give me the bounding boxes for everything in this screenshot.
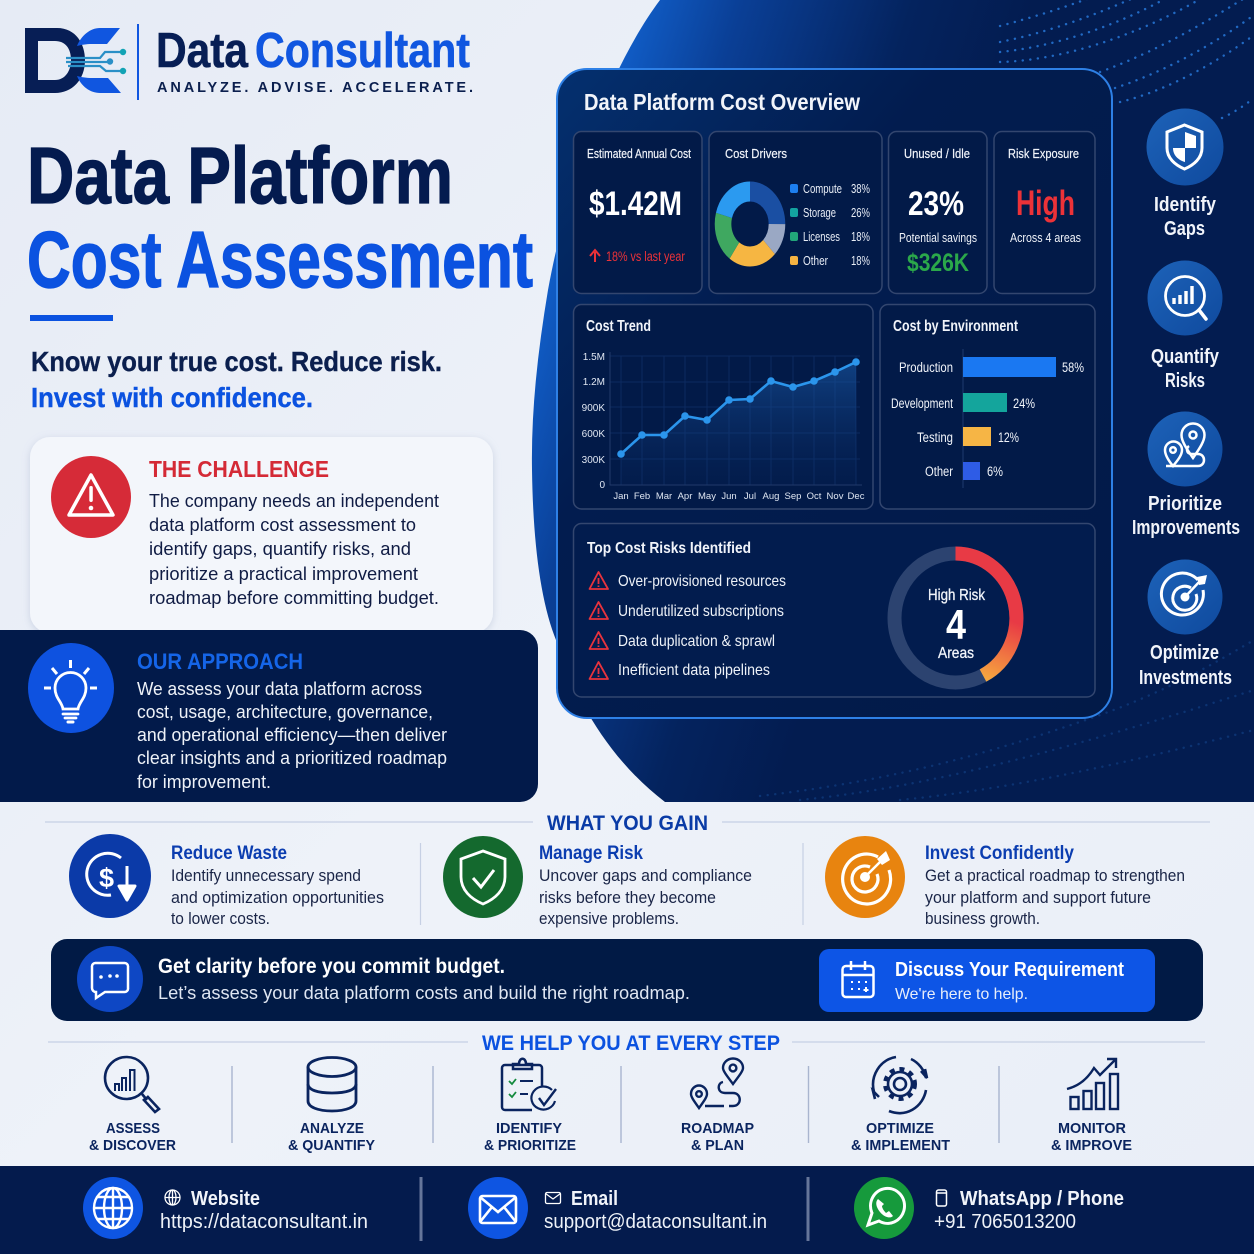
card: estimated annual cost: 18% vs last year (606, 249, 685, 264)
line chart: Jun (721, 491, 737, 502)
card: cost by environment: Cost by Environment (893, 318, 1019, 335)
legend: 26% (851, 206, 870, 220)
icon: optimize investments (1139, 560, 1232, 689)
line chart: Aug (763, 491, 779, 502)
step: analyze and quantify: ANALYZE (300, 1120, 364, 1137)
card: unused idle: 23% (908, 185, 964, 223)
card: risk exposure: High (1016, 184, 1075, 223)
line chart: Nov (827, 491, 844, 502)
panel: data platform cost overview (557, 69, 1112, 718)
title: Cost Assessment (27, 215, 533, 304)
icon: optimize investments: Investments (1139, 667, 1232, 689)
line chart (582, 352, 865, 502)
card: cost drivers: Cost Drivers (725, 146, 787, 161)
icon: identify gaps (1146, 108, 1224, 240)
card: unused idle: $326K (907, 249, 969, 277)
contact: email: Email (571, 1188, 618, 1210)
contact: website: Website (191, 1188, 260, 1210)
subtitle: Invest with confidence. (31, 382, 313, 413)
legend: Compute (803, 182, 842, 196)
benefit: manage risk: Uncover gaps and compliance (539, 867, 752, 885)
line chart: Sep (785, 491, 801, 502)
card: unused idle: Potential savings (899, 230, 977, 245)
step: optimize and implement (851, 1057, 950, 1154)
benefit: reduce waste: Identify unnecessary spend (171, 867, 361, 885)
step: roadmap and plan: & PLAN (691, 1137, 744, 1154)
approach text (137, 679, 447, 792)
bar chart (891, 349, 1084, 488)
logo mark: DC circuit (25, 28, 126, 93)
line chart: Jan (613, 491, 629, 502)
heading: we help you: WE HELP YOU AT EVERY STEP (482, 1032, 780, 1055)
risk list (590, 572, 786, 679)
section: we help you at every step (48, 1032, 1205, 1154)
card: cost trend (574, 304, 873, 509)
line chart: Jul (744, 491, 756, 502)
step: optimize and implement: OPTIMIZE (866, 1120, 934, 1137)
bar chart: Testing (917, 430, 953, 445)
line chart: Oct (807, 491, 822, 502)
contact: website: https://dataconsultant.in (160, 1211, 368, 1233)
contact: whatsapp: WhatsApp / Phone (960, 1188, 1124, 1210)
risk ring gauge: High Risk (928, 587, 986, 604)
line chart: 900K (582, 403, 605, 414)
risk ring gauge: Areas (938, 645, 974, 662)
step: monitor and improve: & IMPROVE (1051, 1137, 1132, 1154)
challenge text: The company needs an independent (149, 490, 439, 511)
logo: Consultant (255, 24, 470, 78)
benefit: invest confidently (825, 836, 1185, 928)
approach text: for improvement. (137, 772, 271, 792)
line chart: Dec (848, 491, 865, 502)
step: monitor and improve: MONITOR (1058, 1120, 1126, 1137)
bar chart: Development (891, 396, 953, 411)
footer (0, 1166, 1254, 1254)
title (27, 131, 533, 304)
card: estimated annual cost (574, 132, 702, 294)
section: what you gain (45, 812, 1210, 928)
challenge text: data platform cost assessment to (149, 514, 416, 535)
card: top cost risks (574, 524, 1095, 697)
icon: quantify risks: Quantify (1151, 346, 1220, 368)
challenge text: prioritize a practical improvement (149, 563, 418, 584)
challenge text: identify gaps, quantify risks, and (149, 538, 411, 559)
bar chart: Production (899, 360, 953, 375)
icon: quantify risks (1148, 260, 1222, 392)
icon: warning (51, 456, 131, 538)
bar chart: 12% (998, 430, 1019, 445)
benefit: reduce waste: $ (99, 863, 114, 893)
step: identify and prioritize: & PRIORITIZE (484, 1137, 576, 1154)
benefit: reduce waste (69, 834, 384, 928)
step: assess and discover (89, 1057, 176, 1154)
card: cost trend: Cost Trend (586, 318, 651, 335)
legend (790, 182, 870, 268)
bar chart: Other (925, 464, 953, 479)
logo (25, 24, 473, 100)
cta text (158, 955, 690, 1003)
legend: 18% (851, 254, 870, 268)
step: monitor and improve (1051, 1059, 1132, 1154)
heading: what you gain: WHAT YOU GAIN (547, 812, 708, 835)
benefit: invest confidently: Get a practical roadmap to strengthen (925, 867, 1185, 885)
panel: the challenge (30, 437, 493, 633)
card: unused idle (888, 132, 987, 294)
icon: optimize investments: Optimize (1150, 642, 1219, 664)
card: unused idle: Unused / Idle (904, 146, 970, 161)
icon: identify gaps: Identify (1154, 194, 1217, 216)
approach text: clear insights and a prioritized roadmap (137, 748, 447, 768)
step: roadmap and plan: ROADMAP (681, 1120, 754, 1137)
step: identify and prioritize: IDENTIFY (496, 1120, 562, 1137)
legend: Other (803, 254, 828, 268)
step: optimize and implement: & IMPLEMENT (851, 1137, 950, 1154)
benefit: reduce waste: to lower costs. (171, 910, 270, 928)
line chart: Apr (678, 491, 692, 502)
card: top cost risks: Top Cost Risks Identified (587, 540, 751, 557)
cta text: Get clarity before you commit budget. (158, 955, 505, 978)
button: discuss your requirement: Discuss Your Requirement (895, 959, 1124, 981)
button: discuss your requirement (819, 949, 1155, 1012)
icon: chat bubble (77, 946, 143, 1012)
step: analyze and quantify: & QUANTIFY (288, 1137, 375, 1154)
benefit: invest confidently: Invest Confidently (925, 843, 1074, 864)
column: value icons (1132, 108, 1240, 689)
call to action banner (51, 939, 1203, 1021)
dashboard heading: Data Platform Cost Overview (584, 89, 860, 115)
line chart: May (698, 491, 716, 502)
benefit: invest confidently: your platform and support future (925, 889, 1151, 907)
contact: website (83, 1177, 368, 1239)
logo wordmark: Data (156, 24, 249, 78)
line chart: 0 (599, 480, 605, 491)
risk ring gauge (894, 554, 1016, 682)
risk ring gauge: 4 (946, 601, 967, 648)
icon: quantify risks: Risks (1165, 370, 1205, 392)
risk list: Data duplication & sprawl (618, 633, 775, 650)
bar chart: 24% (1013, 396, 1035, 411)
step: identify and prioritize (484, 1059, 576, 1154)
panel: our approach (0, 630, 538, 802)
bar chart: 58% (1062, 360, 1084, 375)
legend: Storage (803, 206, 836, 220)
step: assess and discover: ASSESS (106, 1120, 160, 1137)
icon: small globe (165, 1190, 180, 1205)
card: estimated annual cost: Estimated Annual Cost (587, 146, 691, 161)
approach text: cost, usage, architecture, governance, (137, 702, 433, 722)
subtitle: Know your true cost. Reduce risk. (31, 346, 442, 377)
line chart: 600K (582, 429, 605, 440)
benefit: manage risk: expensive problems. (539, 910, 679, 928)
legend: Licenses (803, 230, 840, 244)
card: risk exposure (994, 132, 1095, 294)
icon: calendar (842, 961, 874, 997)
line chart: Feb (634, 491, 650, 502)
risk list: Underutilized subscriptions (618, 603, 784, 620)
heading: the challenge: THE CHALLENGE (149, 456, 329, 482)
logo tagline: ANALYZE. ADVISE. ACCELERATE. (157, 80, 473, 96)
challenge text: roadmap before committing budget. (149, 587, 439, 608)
icon: prioritize improvements (1132, 412, 1240, 539)
icon: small envelope (546, 1192, 560, 1204)
icon: identify gaps: Gaps (1164, 218, 1205, 240)
step: analyze and quantify (288, 1058, 375, 1154)
donut chart (723, 192, 777, 256)
benefit: invest confidently: business growth. (925, 910, 1040, 928)
line chart: 300K (582, 455, 605, 466)
contact: whatsapp: +91 7065013200 (934, 1211, 1076, 1233)
benefit: reduce waste: Reduce Waste (171, 843, 287, 864)
card: risk exposure: Risk Exposure (1008, 146, 1079, 161)
icon: small phone (936, 1190, 946, 1206)
contact: email (468, 1177, 767, 1239)
line chart: Mar (656, 491, 672, 502)
card: cost drivers (709, 132, 882, 294)
line chart: 1.5M (583, 352, 605, 363)
line chart: 1.2M (583, 377, 605, 388)
approach text: We assess your data platform across (137, 679, 422, 699)
bar chart: 6% (987, 464, 1003, 479)
legend: 38% (851, 182, 870, 196)
contact: email: support@dataconsultant.in (544, 1211, 767, 1233)
benefit: reduce waste: and optimization opportunities (171, 889, 384, 907)
step: assess and discover: & DISCOVER (89, 1137, 176, 1154)
approach text: and operational efficiency—then deliver (137, 725, 447, 745)
icon: light bulb (28, 643, 114, 733)
icon: prioritize improvements: Prioritize (1148, 493, 1222, 515)
card: estimated annual cost: $1.42M (589, 185, 682, 223)
step: roadmap and plan (681, 1058, 754, 1154)
risk list: Inefficient data pipelines (618, 662, 770, 679)
legend: 18% (851, 230, 870, 244)
benefit: manage risk (443, 836, 752, 928)
subtitle (31, 346, 442, 413)
title: Data Platform (27, 131, 453, 220)
card: risk exposure: Across 4 areas (1010, 230, 1081, 245)
benefit: manage risk: Manage Risk (539, 843, 643, 864)
card: cost by environment (880, 304, 1095, 509)
contact: whatsapp (854, 1177, 1124, 1239)
heading: our approach: OUR APPROACH (137, 649, 303, 674)
challenge text (149, 490, 439, 608)
cta text: Let’s assess your data platform costs and build the right roadmap. (158, 983, 690, 1003)
button: discuss your requirement: We're here to help. (895, 986, 1028, 1003)
benefit: manage risk: risks before they become (539, 889, 716, 907)
risk list: Over-provisioned resources (618, 573, 786, 590)
